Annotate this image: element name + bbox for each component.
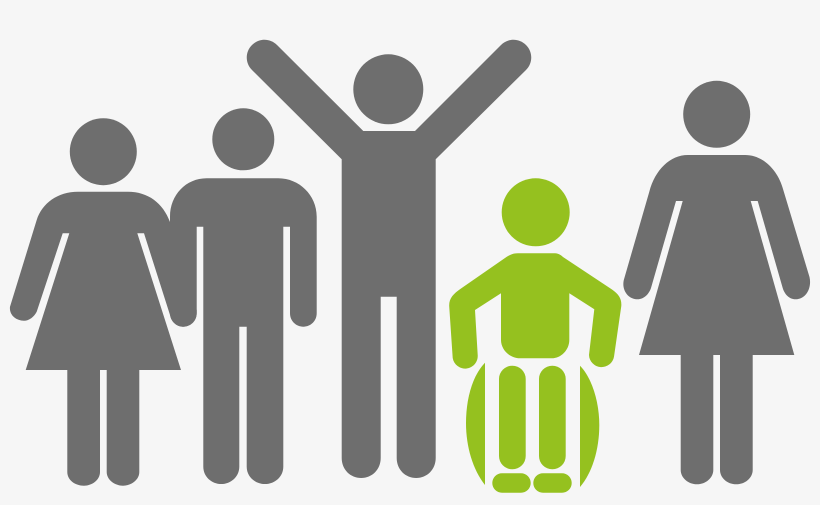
body: man [170,178,317,484]
body: raised-arms person [247,40,531,478]
head: right woman [683,81,750,148]
body: right woman [623,155,810,484]
head: left woman [70,118,137,185]
head: wheelchair user [502,178,570,246]
right foot [533,473,572,493]
left foot [492,473,531,493]
left leg [499,366,526,469]
right leg [539,366,566,469]
icon: woman on the left [10,118,197,486]
left wheel [466,363,485,485]
icon: person with raised arms [247,40,531,478]
torso and arms: wheelchair user [449,253,621,369]
right wheel [580,366,599,487]
head: raised-arms person [353,54,423,124]
icon: man [170,108,317,484]
icon: wheelchair user (green) [449,178,621,493]
body: left woman [10,192,197,486]
icon: woman on the right [623,81,810,484]
head: man [212,108,274,170]
